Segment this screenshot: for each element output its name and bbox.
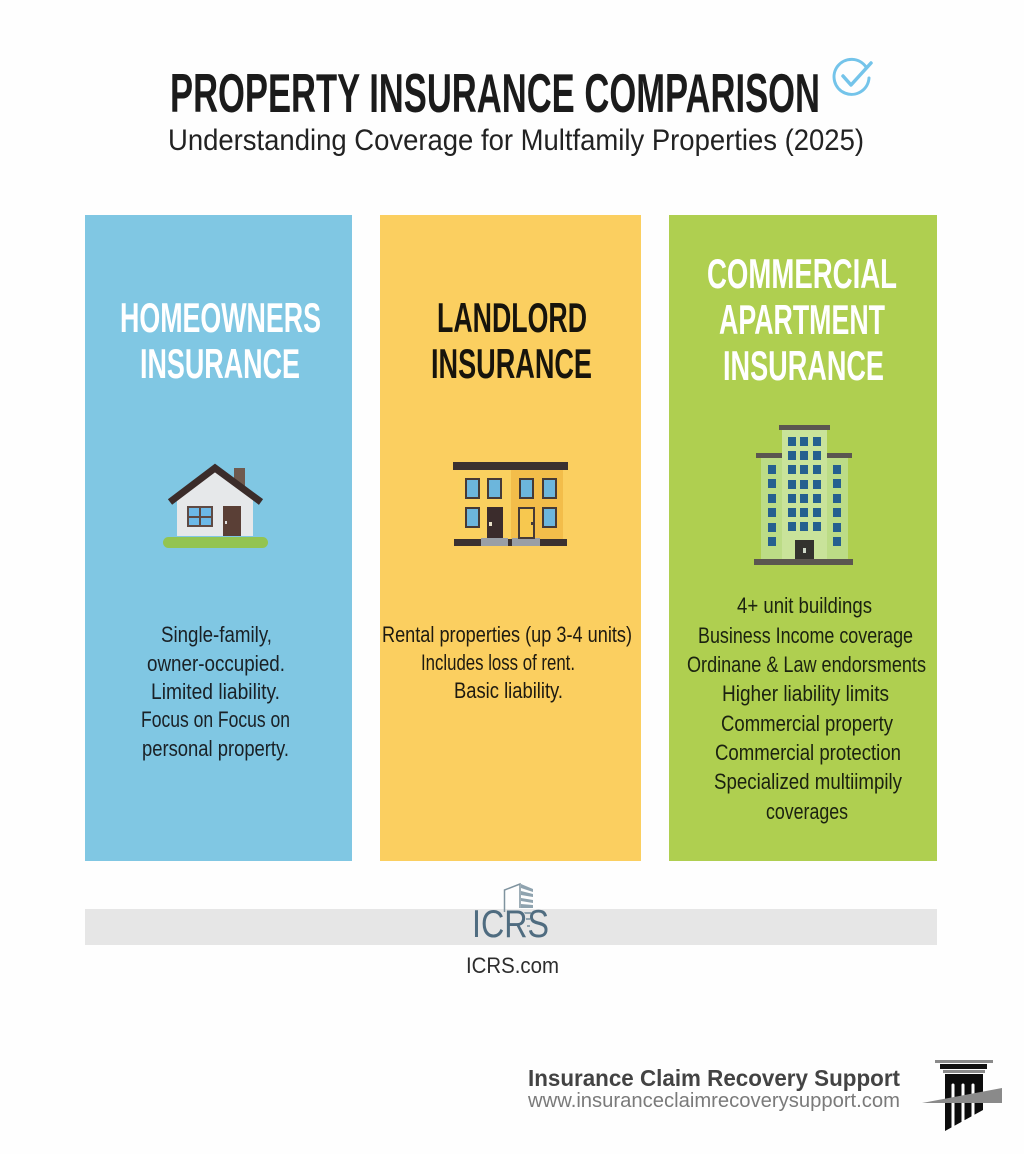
icon: apartment tower: [754, 425, 853, 565]
heading: commercial apartment: APARTMENT: [719, 296, 885, 343]
icon: house: [163, 468, 268, 548]
panel: homeowners insurance: [85, 215, 352, 861]
heading: commercial apartment: [707, 250, 897, 389]
text: commercial coverage: Specialized multiimpily: [714, 769, 902, 794]
heading: commercial apartment: COMMERCIAL: [707, 250, 897, 297]
brand: insurance claim recovery support: Insurance Claim Recovery Support: [528, 1065, 900, 1091]
text: landlord coverage: Basic liability.: [454, 678, 563, 703]
text: homeowners coverage: personal property.: [142, 736, 289, 761]
text: commercial coverage: 4+ unit buildings: [737, 593, 872, 618]
brand url: www.insuranceclaimrecoverysupport.com: [527, 1090, 900, 1112]
text: commercial coverage: Commercial protection: [715, 740, 901, 765]
icon: duplex: [453, 462, 568, 546]
text: landlord coverage: Includes loss of rent.: [421, 650, 575, 675]
text: homeowners coverage: Single-family,: [161, 622, 272, 647]
panel: landlord insurance: [380, 215, 641, 861]
panel: commercial apartment insurance: [669, 215, 937, 861]
text: homeowners coverage: Limited liability.: [151, 679, 280, 704]
text: homeowners coverage: owner-occupied.: [147, 651, 285, 676]
text: ICRS.com: ICRS.com: [466, 953, 559, 978]
text: commercial coverage: Business Income coverage: [698, 623, 913, 648]
text: homeowners coverage: [141, 622, 290, 761]
text: landlord coverage: [382, 622, 632, 703]
logo: ICRS: ICRS: [472, 903, 549, 946]
heading: commercial apartment: INSURANCE: [723, 342, 884, 389]
text: landlord coverage: Rental properties (up 3-4 units): [382, 622, 632, 647]
icon: pillar logo: [922, 1060, 1002, 1131]
subtitle: Understanding Coverage for Multfamily Properties (2025): [168, 124, 864, 157]
text: commercial coverage: Higher liability limits: [722, 681, 889, 706]
logo: ICRS: [472, 884, 549, 946]
text: homeowners coverage: Focus on Focus on: [141, 707, 290, 732]
heading: landlord: INSURANCE: [431, 340, 592, 387]
footer band: [85, 909, 937, 945]
text: commercial coverage: Commercial property: [721, 711, 893, 736]
heading: landlord: [431, 294, 592, 387]
text: commercial coverage: coverages: [766, 799, 848, 824]
heading: homeowners: HOMEOWNERS: [120, 294, 321, 341]
text: commercial coverage: [687, 593, 926, 824]
heading: homeowners: [120, 294, 321, 387]
text: commercial coverage: Ordinane & Law endorsments: [687, 652, 926, 677]
heading: homeowners: INSURANCE: [140, 340, 300, 387]
heading: landlord: LANDLORD: [437, 294, 587, 341]
icon: check mark badge: [834, 59, 871, 94]
